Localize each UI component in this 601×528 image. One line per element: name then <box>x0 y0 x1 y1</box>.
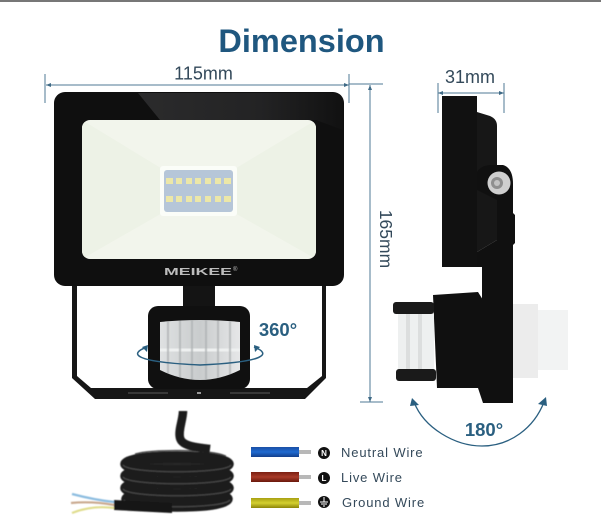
dimension: width 115mm <box>45 64 349 103</box>
dimension: depth 31mm <box>438 67 504 113</box>
neutral wire row: Neutral Wire <box>341 445 423 460</box>
360 degree rotation arrow: 360° <box>259 319 297 340</box>
neutral wire row <box>251 445 423 460</box>
LED board <box>160 166 237 216</box>
coil highlights <box>123 450 231 507</box>
180 degree swing arrow: 180° <box>465 419 503 440</box>
brand logo <box>164 266 238 278</box>
front view: floodlight <box>54 92 344 399</box>
live wire row: L <box>322 474 327 483</box>
side bolt <box>488 172 510 194</box>
side view: floodlight <box>393 96 568 403</box>
neutral wire row: N <box>321 449 327 458</box>
light panel <box>82 120 316 259</box>
sensor housing <box>148 306 250 389</box>
motion sensor front <box>148 286 250 389</box>
sensor body side <box>433 292 483 388</box>
ghost sensor position <box>513 304 568 378</box>
title: Dimension <box>218 23 385 59</box>
exposed wires <box>72 494 114 502</box>
sensor lens <box>160 320 240 380</box>
dimension: height 165mm <box>349 84 396 402</box>
sensor top cap <box>393 302 434 314</box>
panel facets <box>82 120 316 259</box>
bracket slots <box>128 392 270 394</box>
lamp housing <box>54 92 344 286</box>
360 degree rotation arrow <box>138 319 297 365</box>
lamp body side <box>442 96 477 267</box>
cable end <box>114 500 172 513</box>
mounting arm <box>477 165 515 403</box>
180 degree swing arrow <box>410 397 547 446</box>
dimension: height 165mm: 165mm <box>376 210 396 268</box>
brand logo: ® <box>233 266 238 273</box>
dimension: width 115mm: 115mm <box>174 64 233 84</box>
coil stack <box>126 457 228 506</box>
wire legend <box>251 445 425 510</box>
top edge strip <box>0 0 601 2</box>
housing reflection <box>138 93 343 130</box>
ground wire row: Ground Wire <box>342 495 425 510</box>
live wire row <box>251 470 403 485</box>
sensor lens side <box>398 314 434 370</box>
coiled power cable <box>71 411 231 513</box>
ground wire row <box>251 495 425 510</box>
wire bracket <box>72 282 326 399</box>
live wire row: Live Wire <box>341 470 403 485</box>
dimension: depth 31mm: 31mm <box>445 67 495 87</box>
cable tail <box>180 411 210 449</box>
sensor stem <box>183 286 215 308</box>
brand logo: MEIKEE <box>164 266 232 278</box>
sensor bottom cap <box>396 369 436 381</box>
rear heat sink <box>477 112 497 252</box>
